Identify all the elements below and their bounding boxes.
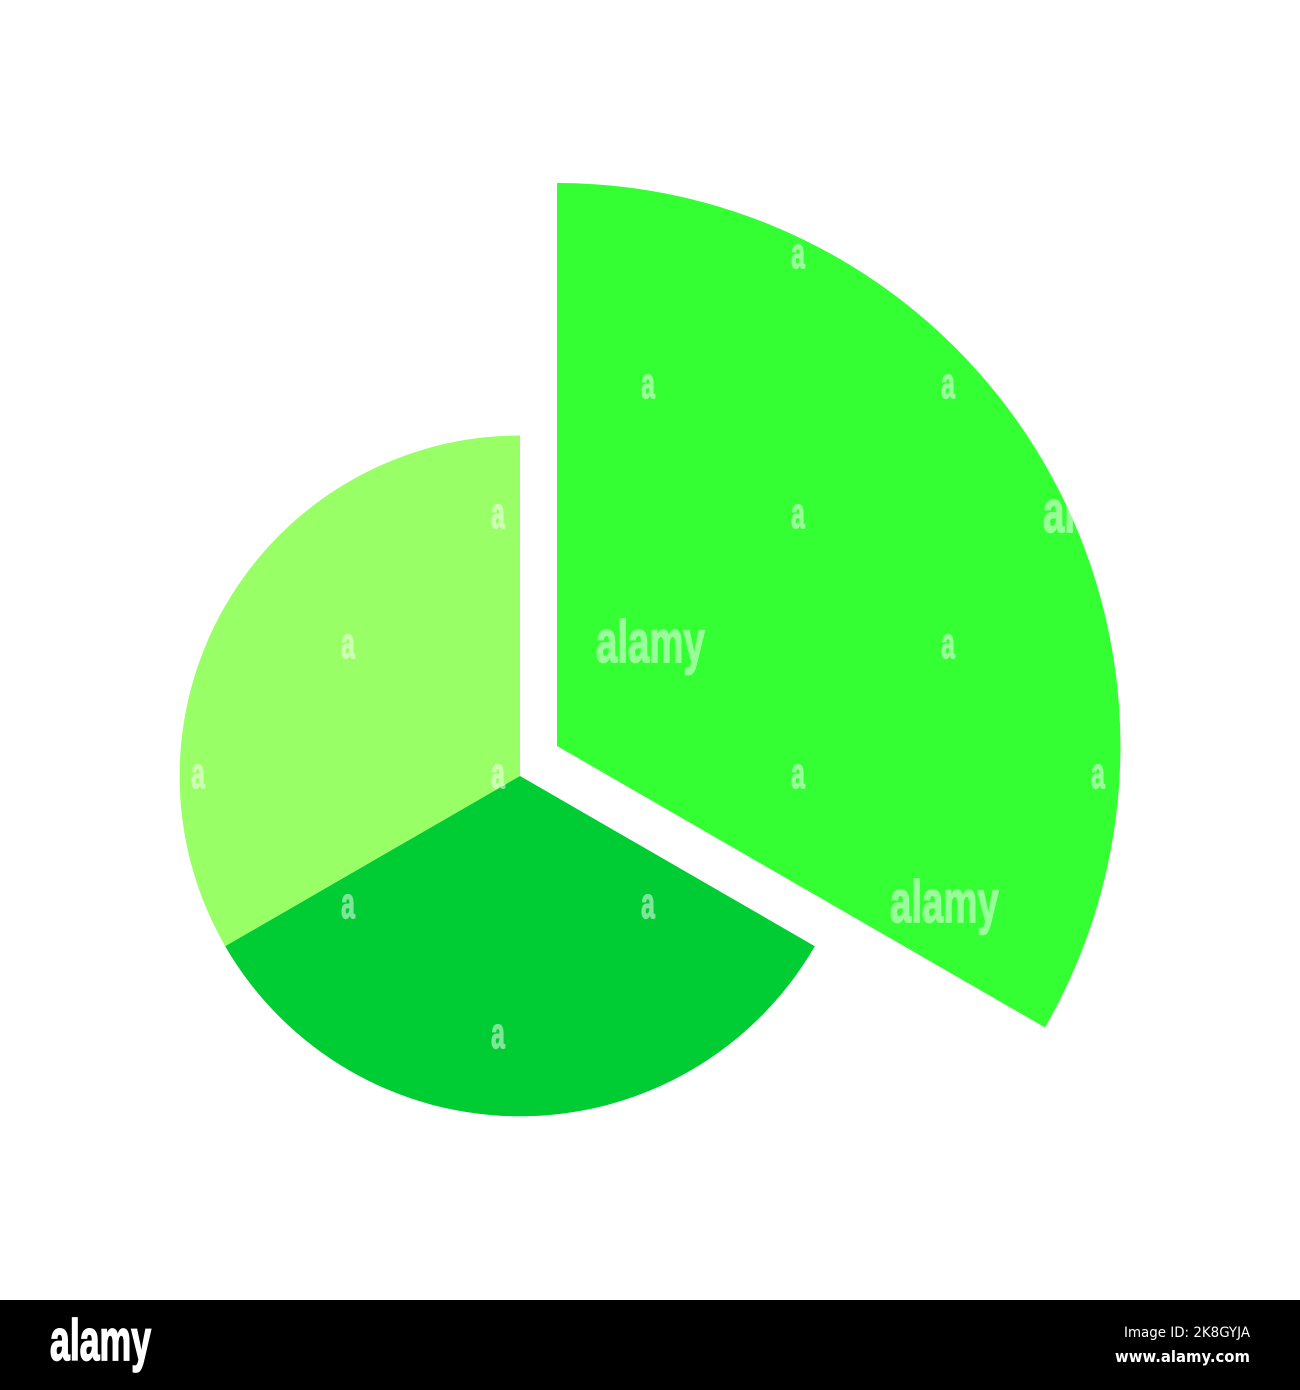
watermark: alamy wordmarks (596, 499, 1078, 936)
website url: www.alamy.com (1115, 1347, 1250, 1366)
segment: dark green, bottom (225, 776, 815, 1116)
watermark: repeated letter marks: a (341, 619, 356, 668)
watermark: alamy wordmarks: alamy (890, 868, 999, 935)
watermark: alamy wordmarks: alamy (1043, 478, 1152, 545)
watermark: repeated letter marks: a (191, 749, 206, 798)
pie chart: three segments (180, 183, 1120, 1116)
watermark: repeated letter marks: a (791, 749, 806, 798)
watermark: repeated letter marks: a (791, 489, 806, 538)
watermark: repeated letter marks: a (641, 879, 656, 928)
watermark: repeated letter marks: a (341, 879, 356, 928)
watermark: repeated letter marks: a (491, 489, 506, 538)
segment: light green, upper left (180, 436, 520, 946)
footer logo: alamy (50, 1310, 151, 1373)
watermark: alamy wordmarks: alamy (596, 608, 705, 675)
watermark: repeated letter marks: a (1091, 749, 1106, 798)
image id: Image ID: 2K8GYJA (1124, 1325, 1250, 1341)
watermark: repeated letter marks: a (941, 359, 956, 408)
watermark: repeated letter marks (191, 229, 1106, 1058)
watermark: repeated letter marks: a (941, 619, 956, 668)
watermark: repeated letter marks: a (641, 359, 656, 408)
watermark: repeated letter marks: a (491, 749, 506, 798)
footer bar (0, 1300, 1300, 1390)
watermark: repeated letter marks: a (491, 1009, 506, 1058)
segment: bright green, enlarged and offset (557, 183, 1120, 1028)
watermark: repeated letter marks: a (791, 229, 806, 278)
